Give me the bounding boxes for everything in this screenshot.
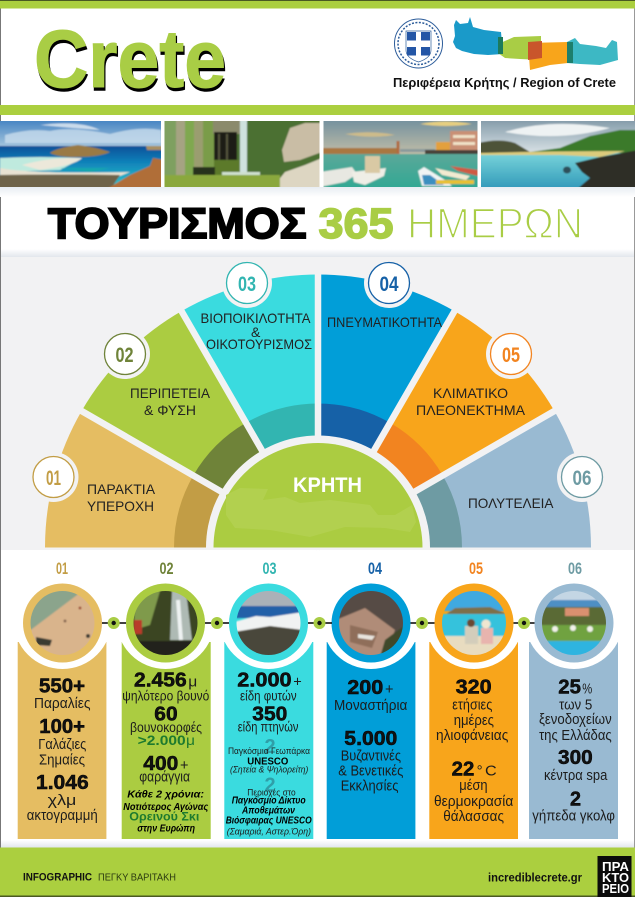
publisher logo: [598, 856, 632, 897]
card 02: adventure: >2.000: [138, 732, 186, 748]
column numbers: 04: [368, 559, 382, 578]
card 03: biodiversity: είδη φυτών: [240, 688, 297, 704]
photo: palm beach: [481, 121, 635, 187]
labels: &: [251, 324, 261, 340]
column numbers: [56, 559, 582, 578]
publisher logo: ΚΤΟ: [602, 870, 629, 885]
card 06: luxury: γήπεδα γκολφ: [532, 809, 615, 825]
photo: monastery: [339, 591, 403, 655]
card 02: adventure: 2.456: [134, 670, 187, 692]
title: Crete: Crete: [35, 17, 227, 108]
card 03: biodiversity: 2.000: [237, 670, 292, 692]
card 02: adventure: Κάθε 2 χρόνια:: [127, 790, 204, 801]
card 05: climate: θερμοκρασία: [434, 794, 513, 810]
main heading: [48, 200, 583, 248]
card 05: climate: ημέρες: [454, 713, 494, 729]
card 05: climate: μέση: [459, 778, 488, 794]
footer credit: ΠΕΓΚΥ ΒΑΡΙΤΑΚΗ: [98, 873, 176, 884]
card 05: climate: °: [477, 764, 483, 780]
card 02: adventure: [122, 584, 211, 839]
card 03: biodiversity: (Σαμαριά, Αστερ.Όρη): [227, 826, 311, 837]
labels: ΠΑΡΑΚΤΙΑ: [87, 481, 156, 497]
card 05: climate: 22: [452, 759, 474, 781]
card 03: biodiversity: είδη πτηνών: [238, 719, 298, 735]
card 06: luxury: [529, 584, 618, 839]
card 02: adventure: ψηλότερο βουνό: [122, 688, 209, 704]
column numbers: 03: [262, 559, 276, 578]
card 03: biodiversity: Παγκόσμια Γεωπάρκα: [228, 746, 310, 757]
card 02: adventure: 400: [143, 753, 178, 775]
photo: Rethymno harbour: [324, 121, 478, 187]
card 03: biodiversity: Αποθεμάτων: [241, 805, 295, 816]
number badge 04: [364, 258, 414, 308]
card 04: spirituality: 5.000: [344, 728, 397, 750]
footer band: [0, 848, 635, 897]
logo: Greek emblem: [394, 19, 442, 68]
labels: & ΦΥΣΗ: [144, 402, 196, 418]
labels: [87, 310, 554, 514]
sector 04: spirituality: [318, 274, 454, 548]
sector 06: luxury: [318, 411, 591, 548]
number badge 03: 03: [238, 273, 256, 296]
card 06: luxury: 2: [570, 789, 581, 811]
sector 03: biodiversity: [182, 274, 318, 548]
card 05: climate: [429, 584, 518, 839]
card 02: adventure: +: [180, 758, 188, 774]
card 06: luxury: ξενοδοχείων: [539, 712, 612, 728]
labels: ΒΙΟΠΟΙΚΙΛΟΤΗΤΑ: [200, 310, 311, 326]
card 02: adventure: βουνοκορφές: [130, 719, 202, 735]
photo: Balos lagoon: [0, 121, 161, 187]
number badge 04: 04: [380, 273, 399, 296]
publisher logo: ΠΡΑ: [602, 859, 630, 874]
labels: ΚΛΙΜΑΤΙΚΟ: [433, 385, 508, 401]
logo caption: Περιφέρεια Κρήτης / Region of Crete: [393, 76, 616, 90]
card 03: biodiversity: UNESCO: [247, 755, 288, 767]
shadow above footer: [1, 840, 634, 848]
card 06: luxury: των 5: [559, 697, 592, 713]
card 01: coast: ακτογραμμή: [27, 808, 98, 824]
card 05: climate: C: [485, 764, 497, 780]
card 04: spirituality: +: [385, 682, 394, 698]
card 04: spirituality: Βυζαντινές: [341, 749, 401, 765]
column numbers: 05: [469, 559, 483, 578]
card 01: coast: χλμ: [48, 793, 76, 809]
card 03: biodiversity: 2: [264, 775, 276, 797]
photo: waterfall: [134, 591, 198, 655]
second green band: [0, 105, 635, 115]
logo: Crete colour map: [453, 17, 618, 70]
card 03: biodiversity: Παγκόσμιο Δίκτυο: [232, 795, 306, 806]
card 03: biodiversity: 2: [264, 736, 276, 758]
card 04: spirituality: & Βενετικές: [338, 764, 403, 780]
footer credit: [23, 872, 176, 884]
number badge 01: [28, 452, 78, 502]
card 04: spirituality: Εκκλησίες: [341, 779, 398, 795]
card 02: adventure: Ορεινού Σκι: [129, 810, 199, 824]
card 02: adventure: στην Ευρώπη: [137, 824, 195, 835]
column numbers: 02: [160, 559, 174, 578]
title: Crete: Crete: [34, 14, 226, 105]
column numbers: 06: [568, 559, 582, 578]
card 01: coast: 550+: [39, 676, 85, 698]
card 06: luxury: κέντρα spa: [544, 768, 608, 784]
number badge 06: [557, 452, 607, 502]
card 03: biodiversity: (Σητεία & Ψηλορείτη): [230, 765, 308, 776]
sector 05: climate: [318, 311, 554, 548]
card 01: coast: [18, 584, 106, 839]
main heading: ΤΟΥΡΙΣΜΟΣ: [48, 200, 306, 248]
sector 01: coastal: [45, 411, 318, 548]
card 03: biodiversity: 350: [252, 704, 287, 726]
footer credit: INFOGRAPHIC: [23, 872, 92, 884]
card 06: luxury: 25: [558, 676, 581, 698]
card 01: coast: Σημαίες: [39, 753, 85, 769]
number badge 02: 02: [116, 344, 134, 367]
card 02: adventure: μ: [188, 675, 197, 691]
card 04: spirituality: [326, 584, 416, 839]
main heading: ΗΜΕΡΩΝ: [407, 200, 583, 248]
card 01: coast: 1.046: [36, 772, 89, 794]
card 03: biodiversity: Βιόσφαιρας UNESCO: [226, 815, 312, 826]
publisher logo: ΡΕΙΟ: [602, 881, 629, 896]
number badge 03: [222, 258, 272, 308]
photo: couple on the beach: [442, 591, 506, 655]
shadow under photos: [0, 187, 635, 197]
card 05: climate: ηλιοφάνειας: [436, 728, 508, 744]
panel: fan diagram: [1, 249, 634, 550]
centre: Crete semicircle: [214, 443, 422, 548]
card 01: coast: 100+: [39, 716, 85, 738]
card 06: luxury: 300: [558, 747, 593, 769]
labels: ΠΝΕΥΜΑΤΙΚΟΤΗΤΑ: [327, 314, 443, 330]
connector line: [102, 617, 534, 629]
card 04: spirituality: Μοναστήρια: [334, 698, 407, 714]
labels: ΥΠΕΡΟΧΗ: [87, 498, 154, 514]
number badge 06: 06: [572, 467, 592, 490]
card 03: biodiversity: [224, 584, 314, 839]
top green band: [0, 0, 635, 8]
card 06: luxury: της Ελλάδας: [539, 728, 612, 744]
footer website: incrediblecrete.gr: [488, 871, 582, 885]
photo: beach: [30, 591, 94, 655]
centre: Crete semicircle: ΚΡΗΤΗ: [293, 474, 362, 497]
column numbers: 01: [56, 559, 68, 578]
labels: ΠΛΕΟΝΕΚΤΗΜΑ: [416, 402, 526, 418]
photo: resort: [542, 591, 606, 655]
card 01: coast: Γαλάζιες: [38, 737, 86, 753]
labels: ΠΟΛΥΤΕΛΕΙΑ: [468, 495, 554, 511]
labels: ΟΙΚΟΤΟΥΡΙΣΜΟΣ: [206, 336, 312, 352]
card 06: luxury: %: [582, 681, 592, 697]
photo: waterfall: [164, 121, 320, 187]
number badge 05: 05: [502, 344, 520, 367]
number badge 05: [486, 329, 536, 379]
card 05: climate: θάλασσας: [443, 809, 504, 825]
labels: ΠΕΡΙΠΕΤΕΙΑ: [130, 385, 211, 401]
main heading: 365: [318, 200, 394, 248]
sector 02: adventure: [82, 311, 318, 548]
number badge 01: 01: [46, 467, 61, 490]
card 02: adventure: μ: [186, 732, 195, 748]
card 04: spirituality: 200: [347, 677, 383, 699]
photo: snowy mountain: [236, 591, 300, 655]
card 02: adventure: φαράγγια: [139, 770, 190, 786]
card 01: coast: Παραλίες: [34, 696, 90, 712]
card 03: biodiversity: +: [293, 675, 302, 691]
card 02: adventure: Νοτιότερος Αγώνας: [123, 802, 209, 813]
card 02: adventure: 60: [154, 704, 178, 726]
card 03: biodiversity: Περιοχές στο: [247, 788, 296, 799]
number badge 02: [100, 329, 150, 379]
card 05: climate: 320: [456, 676, 492, 698]
card 05: climate: ετήσιες: [452, 697, 492, 713]
